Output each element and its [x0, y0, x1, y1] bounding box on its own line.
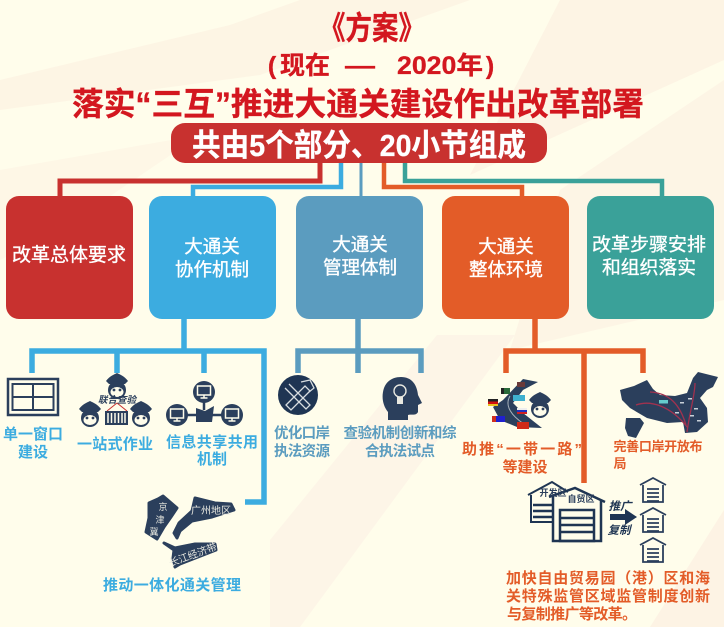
label: port opening: 局	[613, 456, 627, 471]
period line: 2020年	[397, 52, 483, 80]
icon: warehouses and arrow: 推广	[608, 500, 633, 513]
icon: tools	[278, 375, 318, 415]
panel: management system: 大通关	[332, 234, 388, 255]
label: inspection mechanism: 合执法试点	[365, 442, 436, 460]
panel: coordination mechanism: 协作机制	[175, 259, 249, 280]
label: information sharing: 信息共享共用	[166, 433, 258, 451]
icon: regional maps: 长江经济带	[167, 540, 219, 569]
period line: (	[268, 52, 277, 80]
orange branch connectors	[506, 319, 643, 483]
panel: reform steps	[587, 196, 714, 319]
period line: )	[486, 52, 494, 80]
label: free trade reform: 关特殊监管区域监管制度创新	[506, 587, 710, 605]
label: belt and road: 助推“一带一路”	[462, 440, 582, 458]
panel: reform steps: 和组织落实	[602, 257, 696, 278]
label: optimise port resources	[274, 424, 330, 460]
label: optimise port resources: 优化口岸	[274, 424, 330, 442]
panel: overall environment: 整体环境	[469, 259, 543, 280]
panel: reform requirements	[6, 196, 133, 319]
icon: warehouses and arrow: 复制	[608, 524, 633, 537]
label: integrated clearance: 推动一体化通关管理	[103, 576, 241, 594]
label: free trade reform	[506, 569, 710, 623]
label: belt and road	[462, 440, 582, 476]
panel: coordination mechanism: 大通关	[184, 236, 240, 257]
period line: 现在	[280, 52, 330, 80]
label: belt and road: 等建设	[502, 458, 548, 476]
icon: one-stop inspection	[79, 373, 152, 427]
icon: regional maps: 京	[158, 501, 168, 512]
label: inspection mechanism: 查验机制创新和综	[344, 424, 457, 442]
icon: warehouses and arrow: 开发区	[539, 487, 567, 498]
icon: belt and road	[488, 379, 551, 429]
icon: one-stop inspection: 联合查验	[98, 394, 137, 406]
icon: regional maps: 津	[155, 515, 165, 525]
banner pill: 共由5个部分、20小节组成	[192, 128, 526, 163]
icon: regional maps	[146, 496, 234, 569]
panel: management system	[296, 196, 423, 319]
label: single window	[3, 425, 63, 461]
period line	[268, 52, 494, 80]
panel: reform requirements: 改革总体要求	[12, 244, 126, 266]
icon: single window	[8, 379, 58, 415]
label: inspection mechanism	[344, 424, 457, 460]
label: port opening	[613, 439, 702, 471]
icon: china map	[620, 372, 718, 438]
label: optimise port resources: 执法资源	[274, 442, 330, 460]
panel: overall environment: 大通关	[478, 236, 534, 257]
label: single window: 建设	[18, 443, 48, 461]
icon: information sharing	[166, 381, 243, 426]
label: information sharing: 机制	[197, 451, 227, 468]
connectors top	[60, 163, 662, 196]
icon: warehouses and arrow	[528, 478, 666, 562]
label: free trade reform: 加快自由贸易园（港）区和海	[506, 569, 710, 587]
icon: regional maps: 广州地区	[191, 504, 231, 517]
panel: reform steps: 改革步骤安排	[592, 234, 706, 255]
panel: management system: 管理体制	[323, 257, 397, 278]
blue branch connectors	[32, 319, 264, 502]
title: 《方案》	[319, 10, 425, 46]
icon: head with bulb	[383, 377, 422, 420]
icon: warehouses and arrow: 自贸区	[567, 493, 595, 504]
label: information sharing	[166, 433, 258, 468]
headline: 落实“三互”推进大通关建设作出改革部署	[72, 86, 644, 122]
icon: regional maps: 冀	[149, 526, 159, 537]
label: free trade reform: 与复制推广等改革。	[507, 605, 637, 623]
panel: coordination mechanism	[149, 196, 276, 319]
period line: —	[345, 52, 375, 80]
label: single window: 单一窗口	[3, 425, 63, 443]
label: port opening: 完善口岸开放布	[614, 439, 702, 454]
panel: overall environment	[442, 196, 569, 319]
label: one-stop: 一站式作业	[77, 436, 153, 453]
steel branch connectors	[298, 319, 421, 373]
